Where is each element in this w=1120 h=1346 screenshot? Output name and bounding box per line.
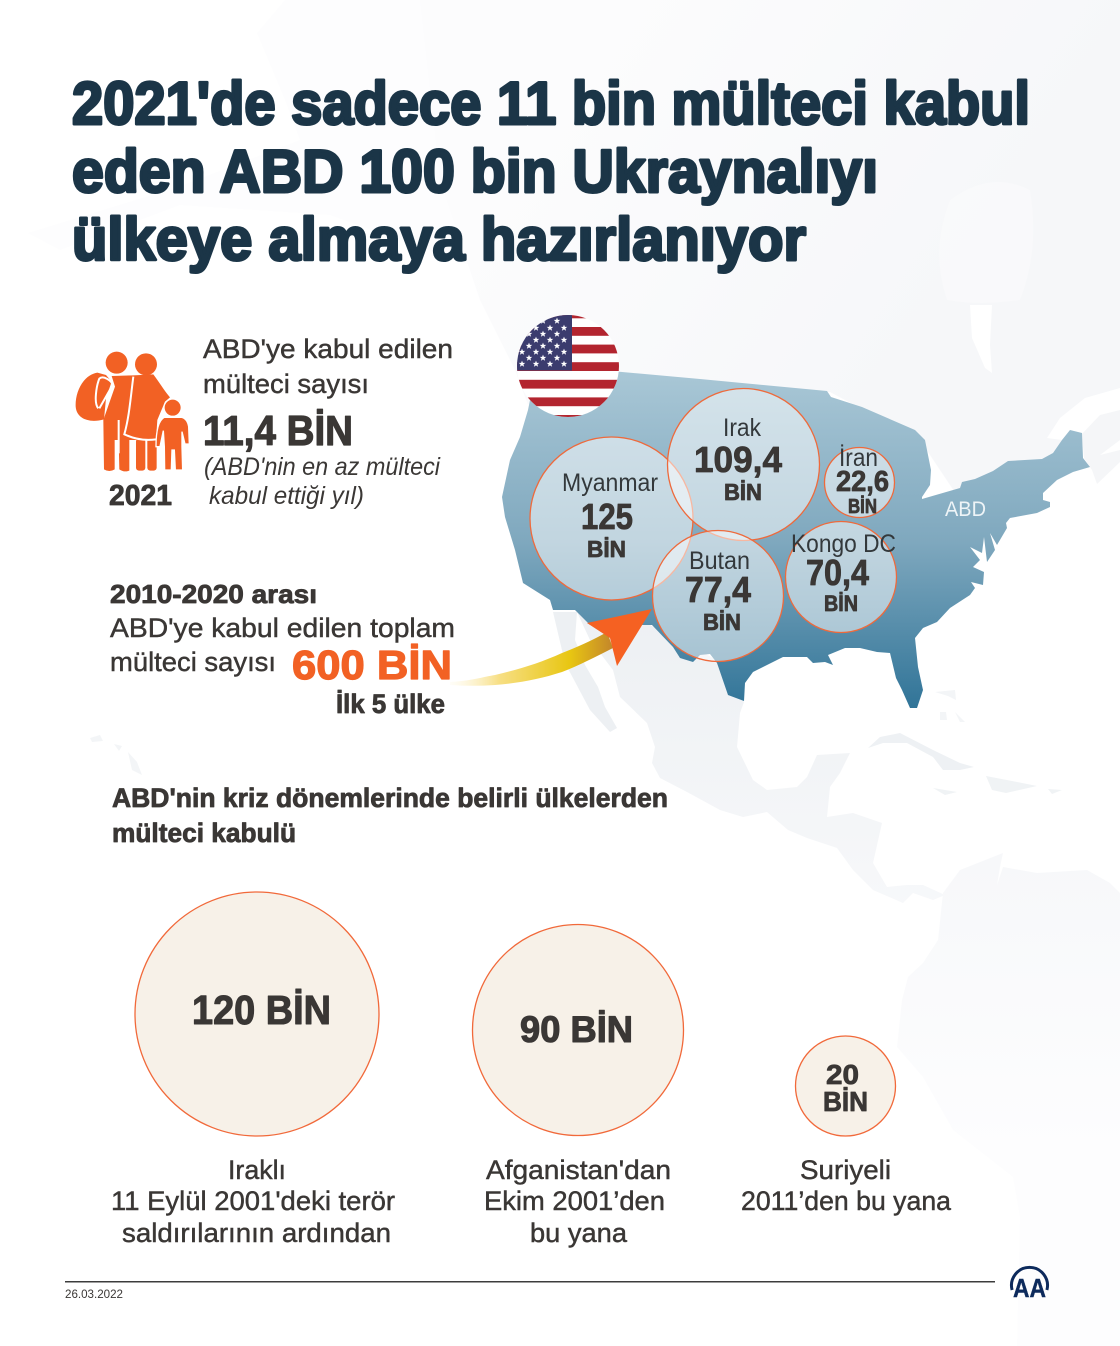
map: Hudson Bay [939,182,1033,303]
circle: Irak: 109,4 [694,439,782,480]
label: Afganistan: bu yana [530,1218,628,1248]
circle: Myanmar: Myanmar [562,469,658,497]
text block: refugees admitted in 2021: 11,4 BİN [203,407,353,454]
map: Hawaii [90,735,142,775]
map of the USA with country circles [502,310,1090,708]
text block: 2010-2020 total [110,579,455,719]
text block: refugees admitted in 2021: ABD'ye kabul edilen [203,334,453,364]
map: Atlantic Canada [1082,410,1120,484]
circle: Kongo DC: 70,4 [806,552,869,593]
label: ABD: ABD [945,498,986,521]
map: Jamaica and Hispaniola [933,776,1062,795]
heading: crisis-period admissions: mülteci kabulü [112,818,296,848]
circle: Kongo DC: Kongo DC [791,530,896,558]
map: Mexico and Central America [577,612,945,903]
circle: 20 BİN: BİN [823,1086,868,1117]
circle: Irak [668,388,820,540]
circle: Butan [652,530,784,662]
circle: İran: BİN [848,495,877,518]
circle: 20 BİN: 20 [826,1059,859,1090]
circle: Kongo DC [786,522,896,632]
label: Suriyeli: Suriyeli [800,1155,891,1185]
label: Afganistan: Ekim 2001’den [484,1186,665,1216]
text block: 2010-2020 total: mülteci sayısı [110,647,276,677]
map: South America [897,853,1120,1346]
flag [517,315,619,417]
text block: 2010-2020 total: ABD'ye kabul edilen toplam [110,613,455,643]
text block: refugees admitted in 2021: kabul ettiği yıl) [209,482,364,510]
circle: İran: İran [839,443,878,472]
label: Afganistan [484,1155,671,1248]
map: Cuba [868,733,974,770]
text block: refugees admitted in 2021 [203,334,453,510]
label: Suriyeli: 2011’den bu yana [741,1186,952,1216]
circle: 20 BİN [796,1036,896,1136]
USA shape [502,370,1090,708]
circle: 120 BİN [135,892,379,1136]
date: 26.03.2022 [65,1289,123,1301]
icon: refugee family [76,352,189,471]
circle: Myanmar: 125 [581,496,633,537]
circle: Butan: BİN [703,609,741,635]
label: Iraklı: Iraklı [228,1155,286,1185]
title: ülkeye almaya hazırlanıyor [72,206,806,273]
label: Afganistan: Afganistan'dan [486,1155,671,1185]
text block: 2010-2020 total: İlk 5 ülke [336,689,445,719]
text block: 2010-2020 total: 2010-2020 arası [110,579,317,609]
circle: Butan: 77,4 [685,569,751,610]
circle: Butan: Butan [689,547,750,575]
label: Iraklı: saldırılarının ardından [122,1218,391,1248]
arrow [450,609,652,686]
circle: İran: 22,6 [836,466,889,498]
title [72,70,1030,273]
circle: 90 BİN: 90 BİN [520,1009,633,1050]
circle: 120 BİN: 120 BİN [192,987,331,1033]
circle: İran [824,443,894,518]
label: Iraklı: 11 Eylül 2001'deki terör [111,1186,395,1216]
text block: 2010-2020 total: 600 BİN [292,642,452,688]
circle: Myanmar [530,437,693,600]
circle: Myanmar: BİN [587,536,626,562]
text block: refugees admitted in 2021: (ABD'nin en az mülteci [204,453,441,481]
year label 2021: 2021 [109,480,172,512]
circle: Irak: Irak [723,414,761,442]
map: Bahamas [935,690,965,722]
circle: Kongo DC: BİN [824,591,858,616]
map: Alaska faint [28,0,600,300]
map: Canada [420,0,1120,500]
circle: Irak: BİN [724,479,762,505]
heading: crisis-period admissions: ABD'nin kriz dönemlerinde belirli ülkelerden [112,783,668,813]
title: 2021'de sadece 11 bin mülteci kabul [72,70,1030,137]
logo: AA: AA [1013,1273,1046,1303]
circle: 90 BİN [472,924,684,1136]
label: Suriyeli [741,1155,952,1216]
map: Baja California [553,612,617,732]
label: Iraklı [111,1155,395,1248]
map: James Bay [970,305,992,373]
heading: crisis-period admissions [112,783,668,848]
text block: refugees admitted in 2021: mülteci sayısı [203,369,369,399]
title: eden ABD 100 bin Ukraynalıyı [72,138,878,205]
